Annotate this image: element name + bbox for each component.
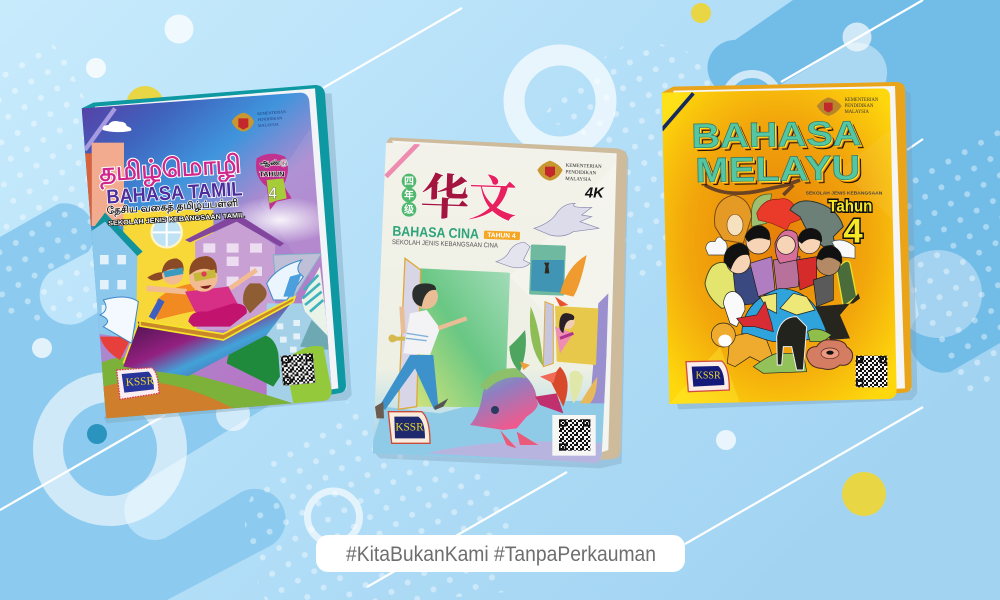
stripes right — [837, 261, 857, 307]
title: Chinese: 文 — [467, 159, 518, 231]
label: Tahun 4: 4 — [843, 213, 863, 251]
yellow building — [123, 210, 213, 330]
globe — [742, 288, 827, 342]
children and dog — [147, 256, 267, 327]
red butterfly — [737, 302, 773, 332]
coat of arms and ministry name — [817, 97, 879, 116]
QR code — [280, 353, 316, 386]
book back and pages — [662, 82, 912, 394]
white ghost — [723, 291, 745, 327]
book back and pages — [82, 85, 346, 397]
ribbon: Tahun 4: ஆண்டு — [260, 158, 287, 168]
title: Tamil: தேசிய வகைத் தமிழ்ப்பள்ளி — [106, 197, 239, 217]
ribbon: Tahun 4: TAHUN — [259, 169, 284, 178]
floor — [373, 400, 610, 463]
coat of arms and ministry name: MALAYSIA — [845, 110, 869, 115]
cloud — [103, 121, 131, 132]
title: Bahasa Melayu: MELAYU — [697, 152, 863, 192]
book: Bahasa Melayu — [657, 82, 917, 409]
year circles: four year: 年 — [404, 189, 414, 202]
subtitle: Bahasa Cina: BAHASA CINA — [392, 223, 479, 242]
clouds — [706, 237, 855, 258]
label: Tahun 4: Tahun — [828, 197, 872, 216]
coat of arms and ministry name — [232, 109, 286, 132]
year circles: four year: 级 — [404, 203, 414, 216]
coat of arms and ministry name — [537, 161, 602, 183]
badge: KSSR: KSSR — [395, 422, 424, 434]
right buildings — [267, 253, 337, 407]
frog — [808, 329, 832, 342]
year circles: four year: 四 — [404, 176, 414, 188]
coat of arms and ministry name: MALAYSIA — [565, 177, 592, 183]
title: Bahasa Melayu: BAHASA — [691, 115, 862, 156]
coat of arms and ministry name: KEMENTERIAN — [566, 164, 602, 170]
book shadow — [103, 93, 352, 423]
orangutan — [715, 195, 752, 243]
blue building — [91, 213, 143, 340]
badge: KSSR — [388, 412, 430, 443]
coat of arms and ministry name: PENDIDIKAN — [845, 104, 874, 109]
purple house — [185, 213, 284, 330]
round window — [150, 216, 183, 249]
boy — [375, 283, 467, 418]
locked panel — [529, 244, 566, 296]
label: Tahun 4 — [828, 197, 872, 251]
coat of arms and ministry name: MALAYSIA — [258, 122, 279, 128]
fish — [470, 362, 563, 448]
label: 4K: 4K — [584, 185, 605, 201]
title: Bahasa Melayu: MELAYU — [696, 151, 862, 191]
subtitle: school type: SEKOLAH JENIS KEBANGSAAN — [806, 190, 883, 196]
title: Tamil — [99, 150, 245, 228]
tapir — [777, 317, 807, 370]
small door with girl — [543, 302, 598, 367]
QR code — [856, 356, 887, 387]
grey turtle — [790, 201, 843, 247]
title: Bahasa Melayu: BAHASA — [693, 117, 864, 158]
badge: KSSR — [686, 361, 729, 392]
cover — [370, 140, 618, 467]
cover — [657, 85, 900, 408]
subtitle: Bahasa Cina — [392, 226, 520, 248]
book shadow — [375, 150, 628, 468]
cover — [77, 87, 340, 423]
ground — [100, 335, 333, 420]
coat of arms and ministry name: PENDIDIKAN — [565, 170, 597, 176]
title: Tamil: SEKOLAH JENIS KEBANGSAAN TAMIL — [108, 212, 245, 228]
subtitle: Bahasa Cina: SEKOLAH JENIS KEBANGSAAN CINA — [392, 239, 499, 250]
title: Bahasa Melayu: BAHASA — [694, 118, 865, 159]
ribbon: Tahun 4: 4 — [268, 185, 277, 202]
QR code — [552, 415, 596, 456]
coat of arms and ministry name: PENDIDIKAN — [257, 115, 282, 122]
title: Tamil: தமிழ்மொழி — [99, 150, 242, 190]
birds — [496, 203, 599, 268]
grass — [753, 353, 807, 373]
flying book — [100, 297, 295, 376]
children — [724, 226, 842, 307]
badge: KSSR: KSSR — [696, 370, 721, 381]
plants — [509, 255, 597, 407]
wings — [100, 260, 303, 343]
peacock tail — [705, 262, 743, 308]
coat of arms and ministry name: KEMENTERIAN — [257, 109, 286, 116]
book: Bahasa Cina — [370, 137, 628, 468]
hashtag pill — [316, 535, 685, 572]
title: Bahasa Melayu: MELAYU — [698, 152, 864, 193]
title: Tamil: BAHASA TAMIL — [106, 178, 243, 209]
salmon building — [85, 143, 124, 227]
decoration: yellow and teal circles — [87, 3, 886, 516]
title: Bahasa Melayu: BAHASA — [692, 116, 863, 157]
hashtag pill: #KitaBukanKami #TanpaPerkauman — [346, 543, 656, 566]
book: Bahasa Tamil — [77, 85, 352, 423]
dark animal — [815, 293, 860, 340]
tiger — [711, 323, 773, 367]
big green door — [388, 258, 510, 409]
subtitle: Bahasa Cina: TAHUN 4 — [487, 232, 516, 240]
badge: KSSR: KSSR — [125, 375, 155, 389]
ribbon: Tahun 4 — [256, 154, 292, 210]
year circles: four year — [402, 174, 416, 217]
book shadow — [677, 90, 917, 409]
badge: KSSR — [117, 368, 159, 399]
leaves and hibiscus — [752, 194, 803, 230]
title: Chinese — [421, 172, 516, 222]
coat of arms and ministry name: KEMENTERIAN — [845, 98, 879, 103]
title: Bahasa Melayu — [691, 115, 866, 193]
title: Chinese: 华 — [420, 157, 471, 229]
rafflesia — [807, 340, 853, 369]
branch — [705, 180, 800, 195]
book back and pages — [386, 137, 627, 460]
title: Bahasa Melayu: MELAYU — [695, 149, 861, 190]
